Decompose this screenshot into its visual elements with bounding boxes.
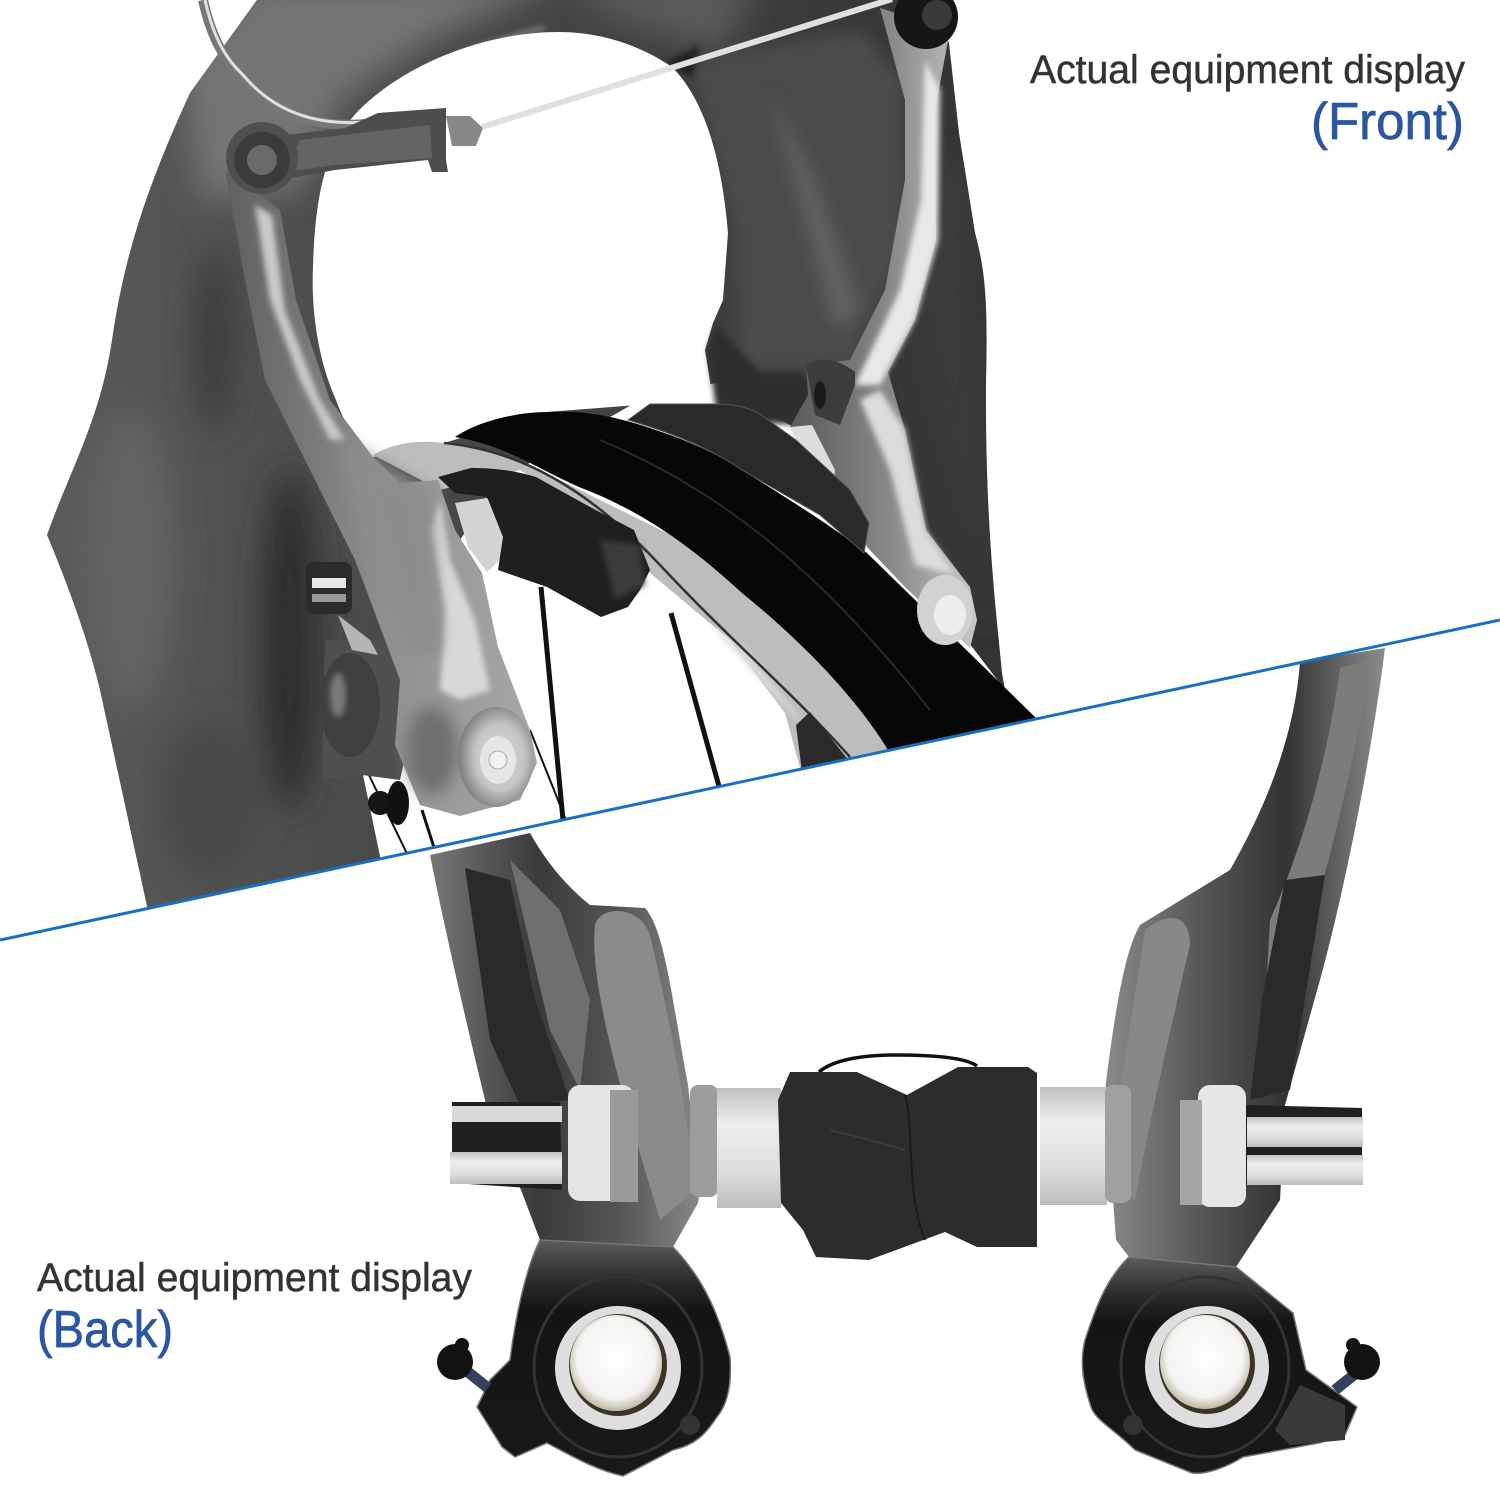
- right eye assembly: [1082, 1257, 1357, 1473]
- right arm lower pivot: [917, 575, 973, 645]
- left eye assembly: [477, 1240, 730, 1476]
- fork inner bulge: [708, 325, 825, 425]
- diagonal divider line: [0, 620, 1500, 940]
- spokes: [368, 587, 720, 862]
- right fork blade: [690, 30, 905, 370]
- right washer and bolt: [1180, 1085, 1363, 1207]
- brake pads: [778, 1067, 1037, 1260]
- right brake pad: [628, 404, 869, 553]
- heading: front label: [1030, 48, 1465, 151]
- central opening of the fork: [313, 32, 728, 457]
- wire above pads: [819, 1055, 977, 1072]
- left brake arm: [225, 170, 537, 816]
- central axle cylinders: [690, 1085, 1131, 1208]
- cable connector: [226, 108, 483, 194]
- left tension screw: [437, 1338, 488, 1388]
- heading: back label: (Back): [37, 1301, 173, 1359]
- bottom bolt nut: [368, 781, 409, 825]
- fork body: [47, 0, 1005, 920]
- left washer and bolt: [450, 1085, 638, 1202]
- heading: front label: Actual equipment display: [1030, 48, 1465, 92]
- right axle stub: [790, 425, 835, 474]
- brake cable: [482, 0, 892, 127]
- left side bolt: [306, 562, 404, 780]
- left brake pad: [438, 468, 650, 617]
- photo: rear view of V-brake assembly: [430, 648, 1385, 1476]
- left arm upper: [430, 833, 700, 1247]
- wheel rim: [373, 442, 905, 775]
- right top bolt: [894, 0, 958, 49]
- left arm recess and ridge: [465, 868, 570, 1105]
- right arm upper: [1105, 648, 1385, 1267]
- heading: back label: Actual equipment display: [37, 1256, 472, 1300]
- left arm lower pivot cap: [406, 706, 458, 794]
- right brake arm: [790, 8, 977, 648]
- right arm recess and ridge: [1265, 660, 1370, 1010]
- tyre: [455, 412, 1040, 760]
- right tension screw: [1335, 1338, 1380, 1390]
- left brake axle: [455, 498, 503, 572]
- heading: back label: [37, 1256, 472, 1359]
- photo: front view of V-brake on bicycle fork: [47, 0, 1040, 920]
- fork surface texture and arch highlight: [85, 0, 990, 880]
- right arm slot: [806, 360, 855, 425]
- top cable ring: [203, 0, 365, 125]
- heading: front label: (Front): [1311, 93, 1464, 151]
